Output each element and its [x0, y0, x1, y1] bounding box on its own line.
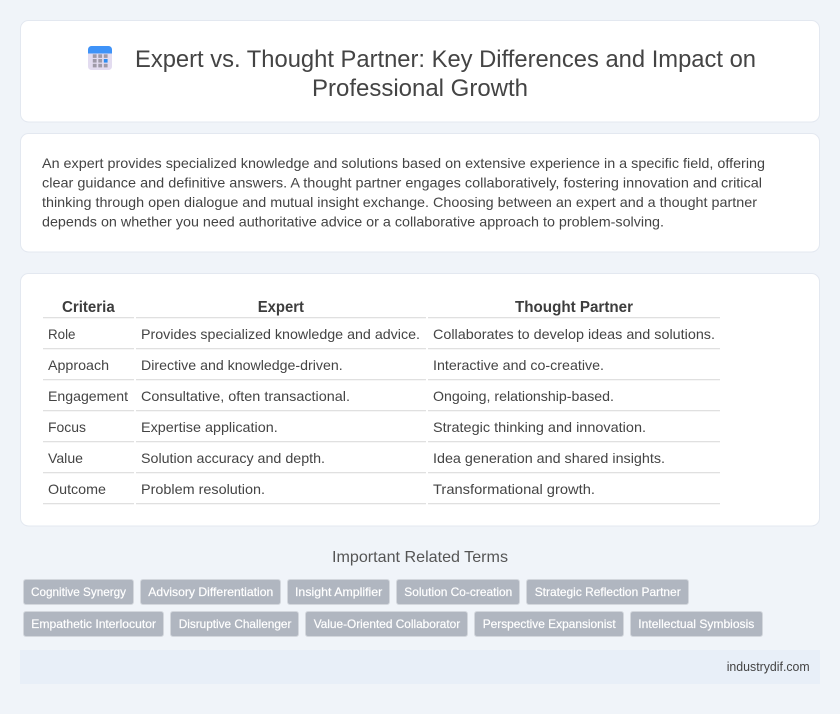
text block: introduction paragraph: An expert provides specialized knowledge and solutions based on extensive experience in a specific field, offering: [42, 155, 765, 171]
tag: Empathetic Interlocutor: Empathetic Interlocutor: [31, 617, 156, 631]
table header row: Expert: [258, 299, 305, 316]
tag: Perspective Expansionist: Perspective Expansionist: [483, 617, 616, 631]
text block: introduction paragraph: thinking through open dialogue and mutual insight exchange. Choosing between an expert and a thought partner: [42, 194, 757, 210]
heading: related terms: Important Related Terms: [332, 549, 508, 566]
table row: Approach: Approach: [48, 357, 109, 373]
text block: introduction paragraph: clear guidance and definitive answers. A thought partner engages collaboratively, fostering innovation and critical: [42, 174, 762, 190]
table row: Outcome: Transformational growth.: [433, 481, 595, 497]
table row: Focus: Expertise application.: [141, 419, 278, 435]
icon: calendar: [88, 46, 112, 70]
tag: Intellectual Symbiosis: [630, 612, 762, 636]
tag: Strategic Reflection Partner: Strategic Reflection Partner: [535, 585, 681, 599]
table row: Focus: [43, 419, 720, 442]
table header row: [43, 299, 720, 318]
tag: Cognitive Synergy: [24, 580, 134, 604]
text block: introduction paragraph: depends on whether you need authoritative advice or a collaborative approach to problem-solving.: [42, 213, 664, 229]
tag: Disruptive Challenger: [170, 612, 298, 636]
tag: Intellectual Symbiosis: Intellectual Symbiosis: [638, 617, 754, 631]
table row: Role: Collaborates to develop ideas and solutions.: [433, 326, 715, 342]
table header row: Thought Partner: [515, 299, 633, 316]
table row: Engagement: Consultative, often transactional.: [141, 388, 350, 404]
title: Professional Growth: [312, 75, 528, 102]
table row: Focus: Strategic thinking and innovation.: [433, 419, 646, 435]
table row: Value: Idea generation and shared insights.: [433, 450, 665, 466]
title: Expert vs. Thought Partner: Key Differences and Impact on: [135, 46, 756, 73]
table row: Outcome: [43, 481, 720, 504]
table header row: Criteria: [62, 299, 115, 316]
footer: [20, 650, 820, 684]
table row: Outcome: Problem resolution.: [141, 481, 265, 497]
table row: Approach: Directive and knowledge-driven.: [141, 357, 343, 373]
table row: Role: Role: [48, 326, 76, 342]
table row: Value: Solution accuracy and depth.: [141, 450, 325, 466]
text block: introduction paragraph: [42, 155, 765, 229]
tag: Value-Oriented Collaborator: Value-Oriented Collaborator: [314, 617, 460, 631]
panel: comparison table: [20, 274, 820, 526]
title: [135, 46, 756, 102]
table row: Approach: [43, 357, 720, 380]
tag: Solution Co-creation: Solution Co-creation: [404, 585, 512, 599]
related term tags: [24, 580, 762, 636]
table row: Engagement: [43, 388, 720, 411]
tag: Insight Amplifier: [288, 580, 390, 604]
table row: Engagement: Engagement: [48, 388, 128, 404]
tag: Value-Oriented Collaborator: [306, 612, 468, 636]
table row: Engagement: Ongoing, relationship-based.: [433, 388, 614, 404]
tag: Disruptive Challenger: Disruptive Challenger: [179, 617, 291, 631]
table row: Value: [43, 450, 720, 473]
tag: Empathetic Interlocutor: [24, 612, 164, 636]
table row: Approach: Interactive and co-creative.: [433, 357, 604, 373]
tag: Advisory Differentiation: Advisory Differentiation: [148, 585, 273, 599]
tag: Cognitive Synergy: Cognitive Synergy: [31, 585, 126, 599]
footer: industrydif.com: [727, 659, 810, 674]
table row: Role: Provides specialized knowledge and advice.: [141, 326, 420, 342]
tag: Solution Co-creation: [396, 580, 520, 604]
table row: Role: [43, 326, 720, 349]
panel: introduction: [20, 134, 820, 252]
table row: Outcome: Outcome: [48, 481, 106, 497]
tag: Advisory Differentiation: [140, 580, 280, 604]
panel: header: [20, 20, 820, 122]
table row: Focus: Focus: [48, 419, 86, 435]
tag: Perspective Expansionist: [474, 612, 624, 636]
tag: Strategic Reflection Partner: [526, 580, 688, 604]
tag: Insight Amplifier: Insight Amplifier: [295, 585, 382, 599]
table row: Value: Value: [48, 450, 83, 466]
